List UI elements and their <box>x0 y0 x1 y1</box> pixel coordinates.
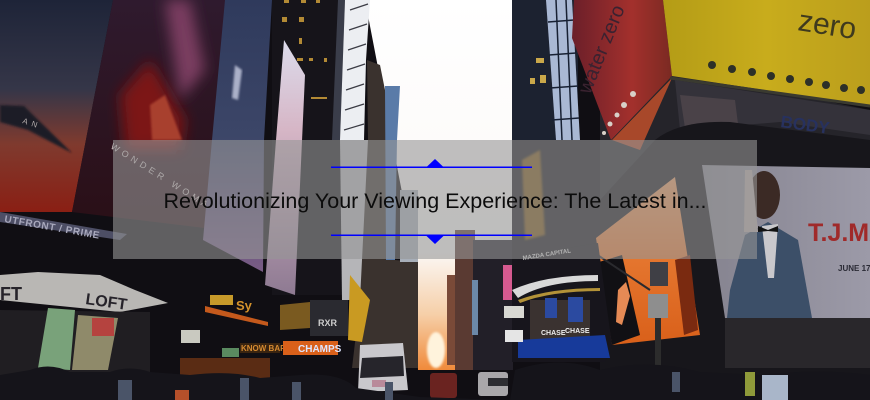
sky with sunset glow <box>365 0 515 370</box>
dark tower with lit windows <box>272 0 345 295</box>
LOFT storefront <box>0 272 168 375</box>
street level signs: Sy <box>236 298 253 313</box>
LOFT storefront: FT <box>0 284 22 304</box>
billboard: Wonder Woman red artwork <box>72 0 228 228</box>
white city bus <box>358 343 408 392</box>
Chase building with curved sign: CHASE <box>541 330 566 337</box>
red angled billboard: water zero <box>574 2 630 98</box>
left billboard: blue to red gradient <box>0 0 113 212</box>
billboard: T.J.Maxx with bearded man <box>702 165 870 318</box>
curved black billboard frame <box>600 122 870 400</box>
man in suit <box>727 170 812 318</box>
building wall below the T.J.Maxx billboard <box>725 318 870 368</box>
Chase building with curved sign: MAZDA CAPITAL <box>522 248 572 262</box>
facade below yellow billboard: BODY <box>779 112 831 138</box>
street level signs <box>180 275 370 378</box>
crowd of pedestrians <box>0 362 870 400</box>
street level signs: CHAMPS <box>298 344 342 355</box>
street traffic <box>430 372 508 398</box>
street level signs: KNOW BAR <box>241 344 286 353</box>
yellow billboard <box>663 0 870 106</box>
distant buildings in the canyon <box>352 60 513 370</box>
orange LED screen <box>590 177 700 378</box>
street glow at horizon <box>427 332 445 368</box>
billboard: Wonder Woman red artwork: WONDER WOMAN <box>109 141 222 217</box>
yellow billboard: zero <box>796 4 859 46</box>
dark building base under the right billboards <box>600 70 870 400</box>
dark glass tower <box>512 0 600 280</box>
blue ornaments: rules with diamond markers <box>331 159 532 244</box>
billboard: T.J.Maxx with bearded man: JUNE 17 <box>838 264 870 273</box>
white striped tower <box>340 0 370 300</box>
left billboard: blue to red gradient: AN <box>21 116 42 131</box>
title text: Revolutionizing Your Viewing Experience: The Latest in... <box>163 189 707 213</box>
Chase building with curved sign <box>503 243 612 362</box>
tall white billboard <box>265 40 305 295</box>
billboard: blue and purple artwork <box>203 0 272 272</box>
facade below yellow billboard <box>675 80 870 138</box>
translucent grey title banner <box>113 140 757 259</box>
LOFT storefront: LOFT <box>84 291 128 314</box>
Frontier / Prime sign: UTFRONT / PRIME <box>3 214 101 242</box>
red angled billboard <box>572 0 672 150</box>
Chase building with curved sign: CHASE <box>565 328 590 335</box>
street level signs: RXR <box>318 318 338 328</box>
